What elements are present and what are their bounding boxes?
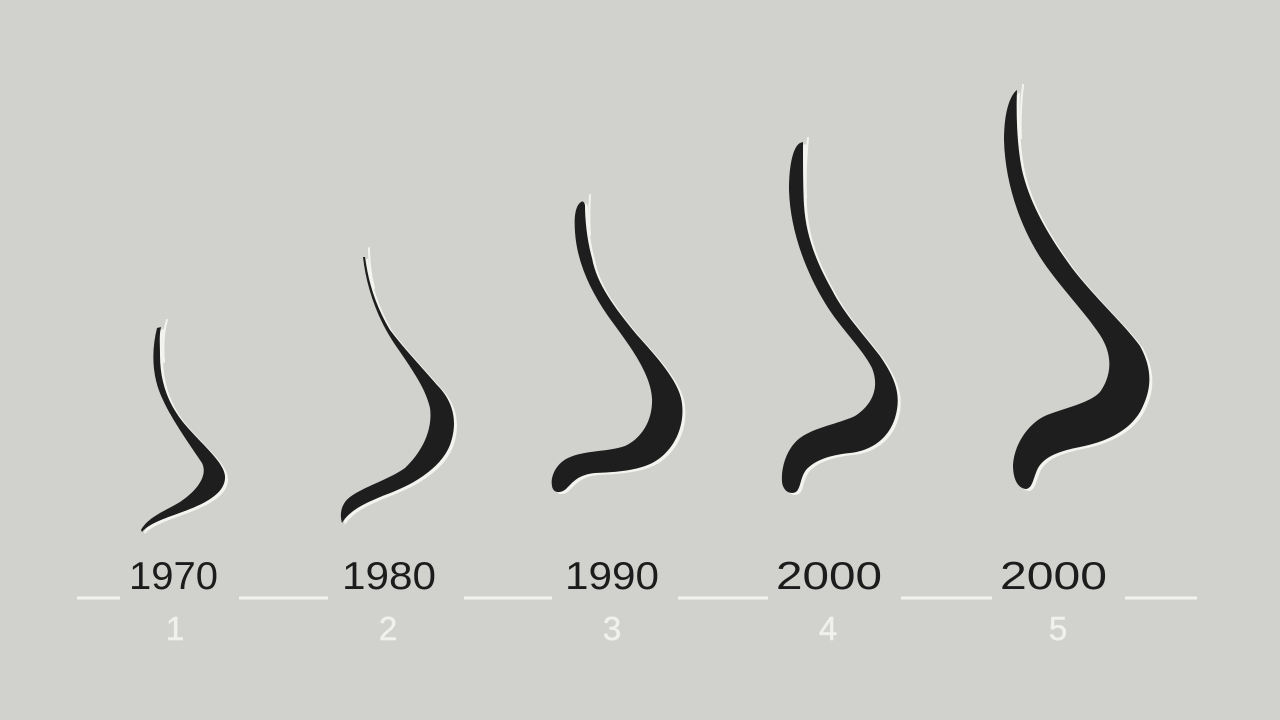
- timeline dashes: [77, 596, 1197, 600]
- number 3: 3: [603, 610, 621, 647]
- year 1990: 1990: [565, 555, 659, 598]
- curve 3: 1990: [552, 195, 685, 494]
- curve 4: 2000: [782, 138, 901, 495]
- curve 1: 1970: [141, 320, 228, 534]
- year labels: [129, 555, 1107, 598]
- number 4: 4: [819, 610, 837, 647]
- year 1970: 1970: [129, 555, 218, 598]
- number 2: 2: [379, 610, 397, 647]
- step numbers: [166, 610, 1067, 647]
- number 5: 5: [1049, 610, 1067, 647]
- curve 2: 1980: [341, 248, 457, 525]
- year 2000 (fifth): 2000: [1000, 555, 1107, 598]
- curve 5: 2000: [1004, 85, 1152, 491]
- number 1: 1: [166, 610, 184, 647]
- year 1980: 1980: [342, 555, 436, 598]
- year 2000 (fourth): 2000: [776, 555, 882, 598]
- curve shapes row: [141, 85, 1152, 534]
